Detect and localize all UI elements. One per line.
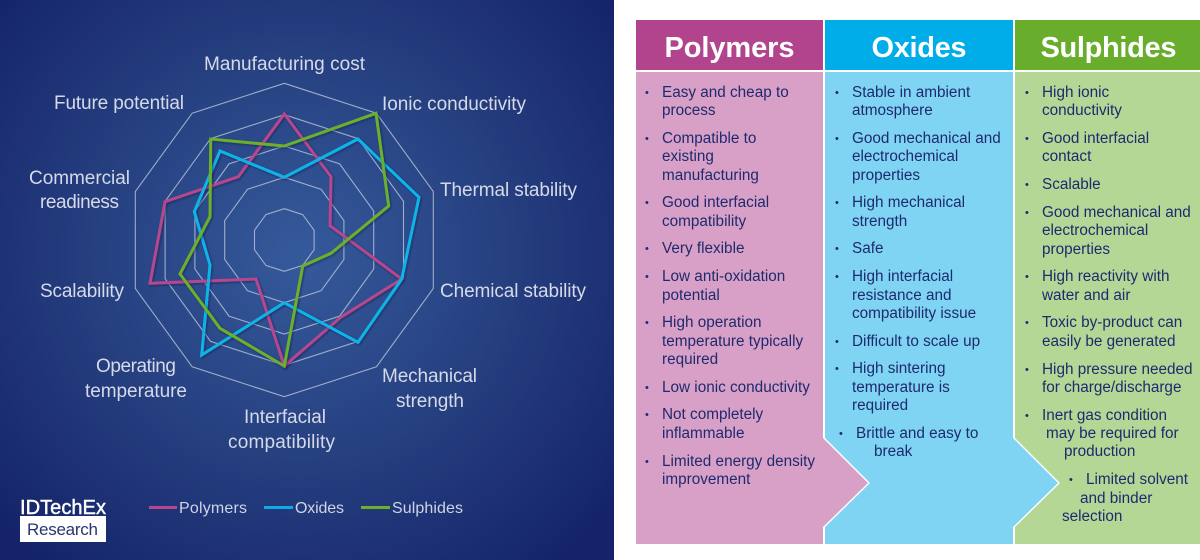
list: Sulphides points: High pressure needed <box>1042 361 1193 378</box>
label: Interfacial compatibility: compatibility <box>228 432 336 453</box>
body: Sulphides <box>1015 72 1200 544</box>
legend item: Sulphides <box>361 500 463 517</box>
list: Sulphides points: water and air <box>1041 287 1130 304</box>
legend item: Polymers: Polymers <box>179 500 247 517</box>
list: Oxides points: • <box>835 87 839 99</box>
list: Oxides points: Difficult to scale up <box>852 333 980 350</box>
logo: IDTechEx Research: IDTechEx <box>20 496 107 519</box>
legend <box>149 500 463 517</box>
list: Polymers points: Compatible to <box>662 130 756 147</box>
body: Polymers <box>636 72 868 544</box>
list: Oxides points: electrochemical <box>852 148 958 165</box>
list: Polymers points: • <box>645 382 649 394</box>
list: Oxides points: • <box>835 336 839 348</box>
list: Polymers points: potential <box>662 287 720 304</box>
list: Polymers points: Good interfacial <box>662 194 769 211</box>
list: Oxides points: Good mechanical and <box>852 130 1001 147</box>
list: Sulphides points: Toxic by-product can <box>1042 314 1182 331</box>
label: Future potential: Future potential <box>54 93 184 114</box>
list: Sulphides points: • <box>1025 87 1029 99</box>
list: Polymers points: • <box>645 133 649 145</box>
list: Sulphides points: may be required for <box>1046 425 1179 442</box>
list: Sulphides points: • <box>1025 207 1029 219</box>
list: Oxides points: • <box>835 363 839 375</box>
label: Operating temperature <box>85 356 187 402</box>
label: Operating temperature: temperature <box>85 381 187 402</box>
series: Oxides <box>194 139 419 355</box>
list: Sulphides points: contact <box>1042 148 1092 165</box>
panel: Sulphides column <box>1015 20 1200 544</box>
list: Oxides points: resistance and <box>852 287 952 304</box>
list: Sulphides points: Good mechanical and <box>1042 204 1191 221</box>
list: Polymers points: manufacturing <box>662 167 759 184</box>
list: Polymers points <box>645 84 815 488</box>
list: Oxides points: Stable in ambient <box>852 84 971 101</box>
list: Oxides points: • <box>839 428 843 440</box>
series: Sulphides <box>180 113 389 366</box>
panel: radar chart background <box>0 0 614 560</box>
list: Sulphides points: High ionic <box>1042 84 1110 101</box>
list: Polymers points: • <box>645 197 649 209</box>
label: Operating temperature: Operating <box>96 356 176 377</box>
label: Ionic conductivity: Ionic conductivity <box>382 94 526 115</box>
list: Sulphides points: • <box>1025 317 1029 329</box>
label: Interfacial compatibility <box>228 407 336 453</box>
radar grid rings <box>135 83 433 397</box>
panel: Oxides column <box>825 20 1058 544</box>
list: Polymers points: compatibility <box>662 213 747 230</box>
list: Oxides points: compatibility issue <box>852 305 976 322</box>
list: Polymers points: Easy and cheap to <box>662 84 789 101</box>
list: Polymers points: process <box>662 102 716 119</box>
list: Sulphides points: for charge/discharge <box>1042 379 1181 396</box>
list: Polymers points: • <box>645 456 649 468</box>
list: Polymers points: • <box>645 271 649 283</box>
legend item: Sulphides: Sulphides <box>392 500 463 517</box>
list: Oxides points: break <box>874 443 913 460</box>
label: Thermal stability: Thermal stability <box>440 180 578 201</box>
list: Polymers points: • <box>645 243 649 255</box>
label: Commercial readiness <box>29 168 130 213</box>
heading: Sulphides <box>1015 20 1200 70</box>
list: Oxides points: High mechanical <box>852 194 965 211</box>
list: Sulphides points: • <box>1025 179 1029 191</box>
heading: Polymers <box>636 20 823 70</box>
list: Sulphides points: • <box>1025 364 1029 376</box>
list: Polymers points: Limited energy density <box>662 453 815 470</box>
list: Sulphides points: Inert gas condition <box>1042 407 1167 424</box>
list: Oxides points: Safe <box>852 240 883 257</box>
legend item: Polymers <box>149 500 247 517</box>
logo: IDTechEx Research: Research <box>27 520 98 539</box>
list: Oxides points: • <box>835 133 839 145</box>
panel: Polymers column <box>636 20 868 544</box>
list: Sulphides points: conductivity <box>1042 102 1122 119</box>
list: Oxides points: Brittle and easy to <box>856 425 978 442</box>
list: Sulphides points <box>1025 84 1193 525</box>
list: Polymers points: existing <box>662 148 714 165</box>
list: Sulphides points: Good interfacial <box>1042 130 1149 147</box>
label: Mechanical strength: Mechanical <box>382 366 477 387</box>
logo: IDTechEx Research <box>20 496 107 542</box>
list: Polymers points: temperature typically <box>662 333 803 350</box>
list: Sulphides points: selection <box>1062 508 1122 525</box>
list: Oxides points: • <box>835 243 839 255</box>
list: Sulphides points: • <box>1025 410 1029 422</box>
label: Mechanical strength <box>382 366 477 412</box>
list: Sulphides points: production <box>1064 443 1135 460</box>
label: Chemical stability: Chemical stability <box>440 281 586 302</box>
list: Oxides points: required <box>852 397 908 414</box>
list: Oxides points: High sintering <box>852 360 946 377</box>
list: Sulphides points: easily be generated <box>1042 333 1176 350</box>
legend item: Oxides <box>264 500 344 517</box>
axis labels <box>29 54 586 453</box>
list: Polymers points: • <box>645 409 649 421</box>
list: Sulphides points: High reactivity with <box>1042 268 1170 285</box>
label: Scalability: Scalability <box>40 281 124 302</box>
heading: Sulphides: Sulphides <box>1040 32 1176 64</box>
list: Oxides points <box>835 84 1001 460</box>
label: Mechanical strength: strength <box>396 391 464 412</box>
list: Sulphides points: properties <box>1042 241 1110 258</box>
list: Polymers points: inflammable <box>662 425 744 442</box>
label: Interfacial compatibility: Interfacial <box>244 407 326 428</box>
body: Oxides <box>825 72 1058 544</box>
list: Polymers points: required <box>662 351 718 368</box>
list: Sulphides points: • <box>1069 474 1073 486</box>
list: Polymers points: Low ionic conductivity <box>662 379 810 396</box>
list: Sulphides points: Scalable <box>1042 176 1101 193</box>
list: Polymers points: • <box>645 317 649 329</box>
list: Oxides points: properties <box>852 167 920 184</box>
list: Sulphides points: and binder <box>1080 490 1152 507</box>
series: Polymers <box>150 114 402 366</box>
list: Polymers points: High operation <box>662 314 762 331</box>
list: Oxides points: strength <box>852 213 907 230</box>
list: Oxides points: High interfacial <box>852 268 953 285</box>
radar chart <box>135 83 433 397</box>
heading: Polymers: Polymers <box>664 32 794 64</box>
list: Sulphides points: • <box>1025 271 1029 283</box>
list: Sulphides points: Limited solvent <box>1086 471 1189 488</box>
list: Oxides points: atmosphere <box>852 102 933 119</box>
label: Commercial readiness: readiness <box>40 192 119 213</box>
label: Manufacturing cost: Manufacturing cost <box>204 54 366 75</box>
list: Polymers points: • <box>645 87 649 99</box>
list: Oxides points: • <box>835 197 839 209</box>
list: Polymers points: Low anti-oxidation <box>662 268 785 285</box>
heading: Oxides <box>825 20 1013 70</box>
list: Sulphides points: electrochemical <box>1042 222 1148 239</box>
label: Commercial readiness: Commercial <box>29 168 130 189</box>
list: Sulphides points: • <box>1025 133 1029 145</box>
legend item: Oxides: Oxides <box>295 500 344 517</box>
list: Polymers points: Not completely <box>662 406 764 423</box>
list: Polymers points: improvement <box>662 471 751 488</box>
list: Oxides points: • <box>835 271 839 283</box>
list: Oxides points: temperature is <box>852 379 950 396</box>
list: Polymers points: Very flexible <box>662 240 744 257</box>
heading: Oxides: Oxides <box>872 32 966 64</box>
